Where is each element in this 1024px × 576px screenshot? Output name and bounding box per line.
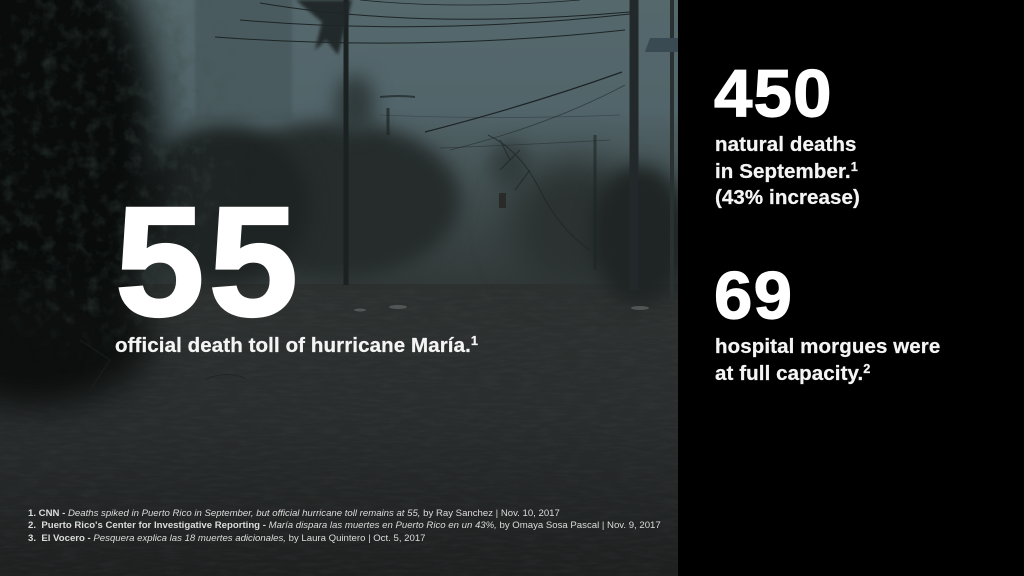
stat caption: hospital morgues: hospital morgues were [715, 335, 940, 358]
footnotes: 1. CNN - Deaths spiked in Puerto Rico in September, but official hurricane toll remains at 55, by Ray Sanchez | Nov. 10, 2017 [28, 508, 560, 519]
footnotes: 3. El Vocero - Pesquera explica las 18 muertes adicionales, by Laura Quintero | Oct. 5, 2017 [28, 533, 426, 544]
stat number: 450: 450 [714, 56, 833, 131]
stat number: 69: 69 [714, 258, 793, 333]
leaning branches [80, 135, 590, 390]
headline number: 55: 55 [115, 175, 302, 349]
poles and wires [215, 0, 672, 300]
road texture [0, 290, 678, 576]
headline caption: official death toll of hurricane María.1 [115, 333, 478, 357]
street lamp box [645, 38, 678, 52]
stat caption: natural deaths [715, 133, 860, 209]
palm fronds [296, 0, 352, 55]
stat caption: natural deaths: (43% increase) [715, 186, 860, 209]
traffic light [499, 193, 506, 208]
road [0, 284, 678, 576]
footnotes [28, 508, 661, 544]
stat caption: natural deaths: natural deaths [715, 133, 857, 156]
building in fog [195, 0, 292, 120]
panel: storm photograph [0, 0, 678, 576]
tree masses [0, 0, 688, 420]
stat caption: hospital morgues: at full capacity.2 [715, 361, 870, 384]
sky [0, 0, 678, 310]
debris [354, 305, 649, 312]
stat caption: hospital morgues [715, 335, 940, 384]
footnotes: 2. Puerto Rico's Center for Investigative Reporting - María dispara las muertes en Puerto Rico en un 43%, by Omaya Sosa Pascal | Nov. 9, 2017 [28, 520, 661, 531]
stat caption: natural deaths: in September.1 [715, 159, 858, 182]
panel: side statistics [678, 0, 1024, 576]
